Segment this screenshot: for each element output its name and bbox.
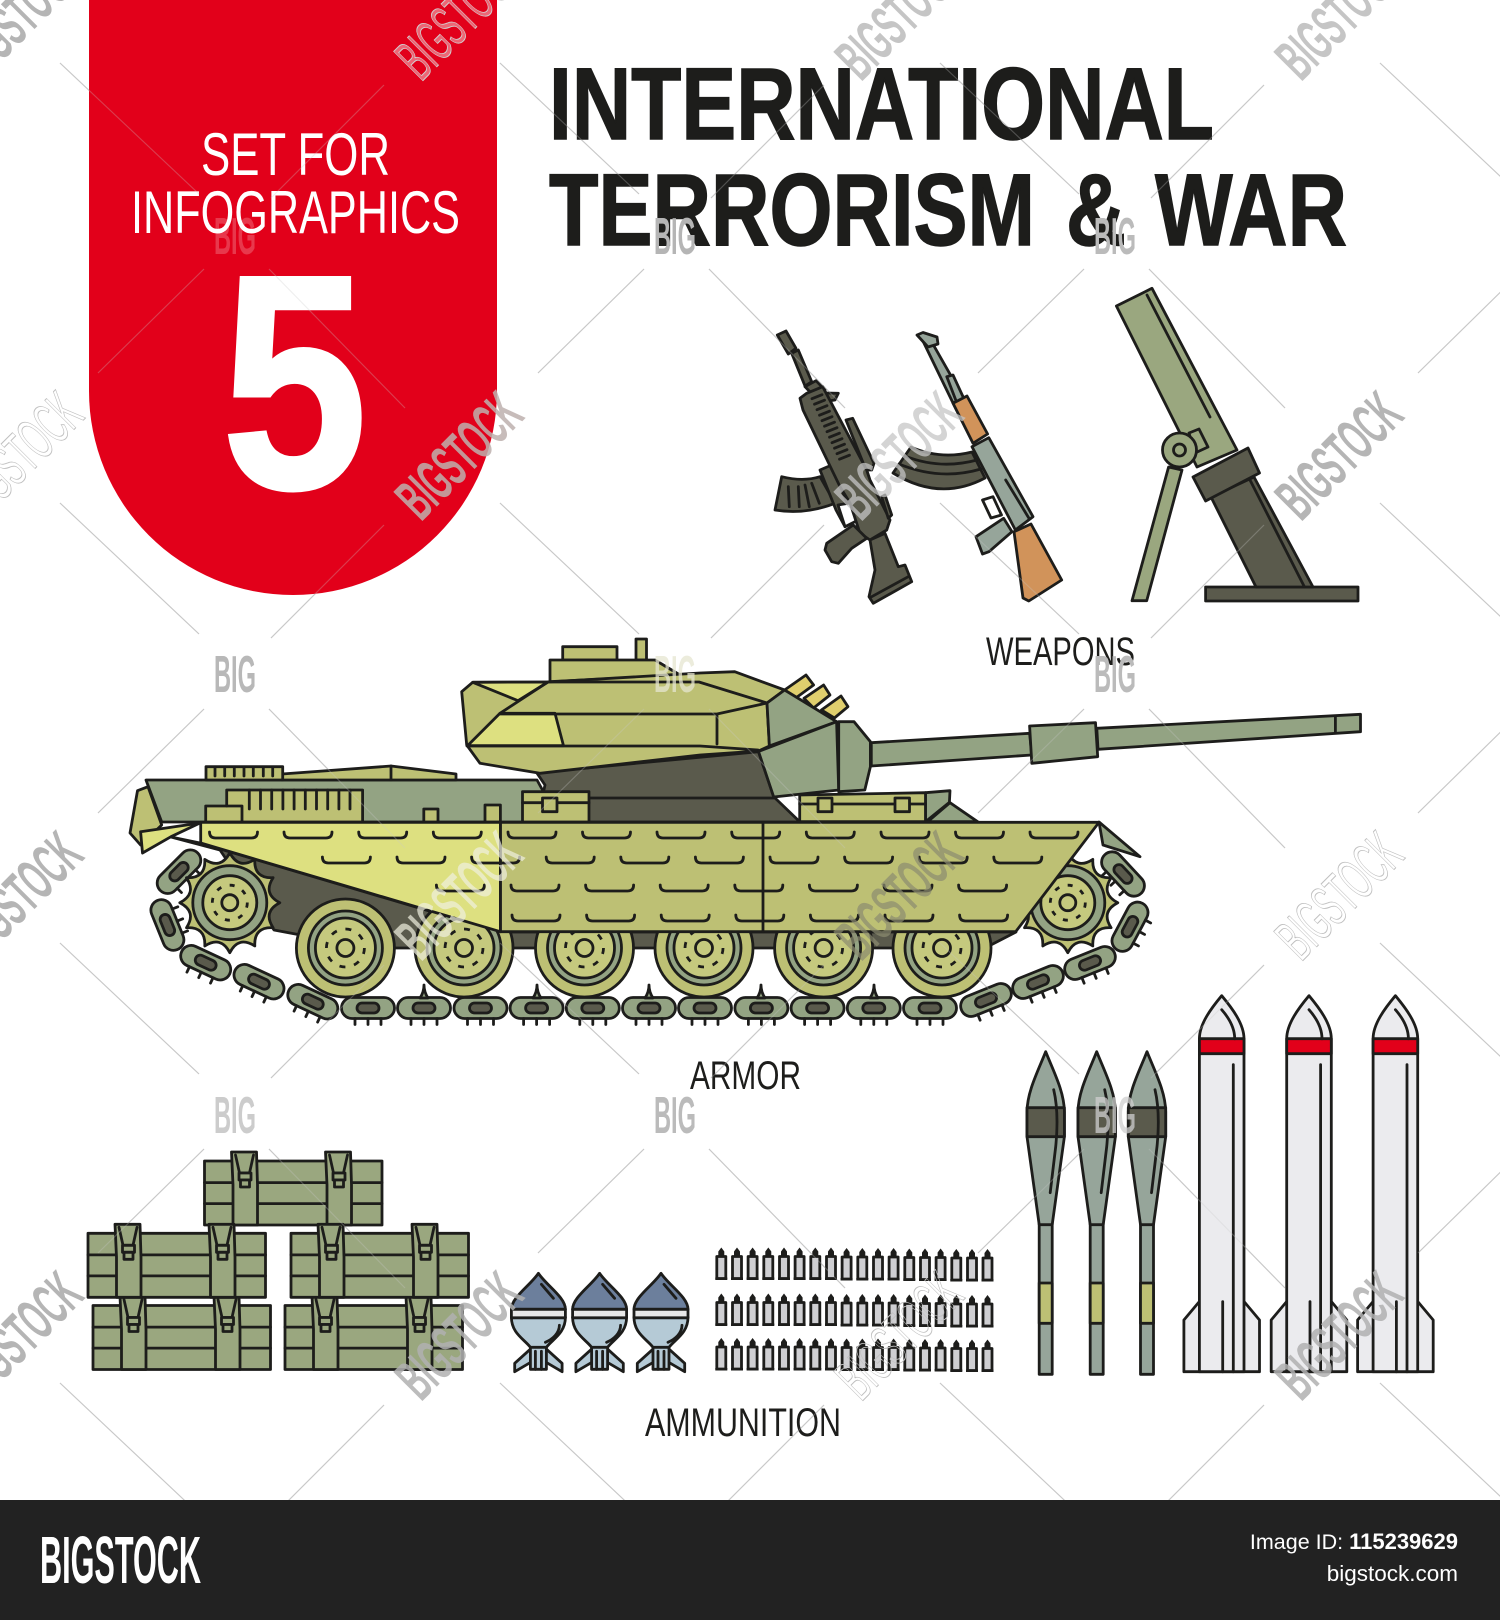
label: weapons: WEAPONS (986, 630, 1135, 674)
title: INTERNATIONAL (549, 47, 1214, 161)
icon: assault rifle (775, 331, 912, 603)
watermark: BIG (214, 208, 256, 266)
missiles (1184, 996, 1433, 1372)
badge text: infographics: INFOGRAPHICS (131, 179, 460, 246)
label: armor: ARMOR (690, 1054, 801, 1098)
tank turret base (537, 752, 800, 822)
title: TERRORISM (549, 153, 1035, 267)
footer bar (0, 1500, 1500, 1620)
watermark: BIG (214, 646, 256, 704)
tank hull (201, 822, 1140, 932)
label: ammunition: AMMUNITION (645, 1401, 841, 1445)
icon: kalashnikov rifle (893, 332, 1062, 601)
tank stowage boxes (522, 791, 978, 822)
ammunition boxes (88, 1152, 468, 1370)
watermark: BIG (654, 646, 696, 704)
footer image id: Image ID: 115239629 (1250, 1529, 1458, 1554)
icon: mortar (1116, 288, 1358, 601)
watermark: BIGSTOCK (823, 1259, 975, 1412)
tank turret (462, 639, 870, 797)
footer site: bigstock.com (1327, 1561, 1458, 1586)
watermark: BIG (1094, 1087, 1136, 1145)
tank gun barrel (871, 714, 1360, 766)
badge number: 5 (221, 212, 368, 553)
badge text: set for: SET FOR (201, 121, 390, 188)
tank road wheels (296, 899, 991, 997)
title: & (1066, 153, 1126, 267)
title: WAR (1155, 153, 1347, 267)
footer bar: BIGSTOCK (40, 1523, 201, 1598)
bombs (511, 1273, 688, 1372)
rocket grenades (1027, 1052, 1166, 1374)
watermark: BIGSTOCK (383, 379, 535, 532)
watermark: BIG (1094, 646, 1136, 704)
watermark: BIG (654, 1087, 696, 1145)
badge: red banner (89, 0, 497, 595)
watermark: BIG (214, 1087, 256, 1145)
track links (148, 846, 1157, 1028)
tank underbody (171, 837, 1016, 948)
watermark: BIGSTOCK (383, 1259, 535, 1412)
bullets (715, 1248, 994, 1372)
watermark: BIGSTOCK (823, 819, 975, 972)
tank sprockets (180, 853, 1118, 953)
title (549, 47, 1347, 267)
watermark: BIG (654, 208, 696, 266)
watermark: BIG (1094, 208, 1136, 266)
tank rear deck (146, 766, 560, 822)
tank (130, 639, 1360, 1028)
watermark: BIGSTOCK (383, 819, 535, 972)
tank rear flaps (130, 787, 200, 853)
watermark: BIGSTOCK (823, 379, 975, 532)
